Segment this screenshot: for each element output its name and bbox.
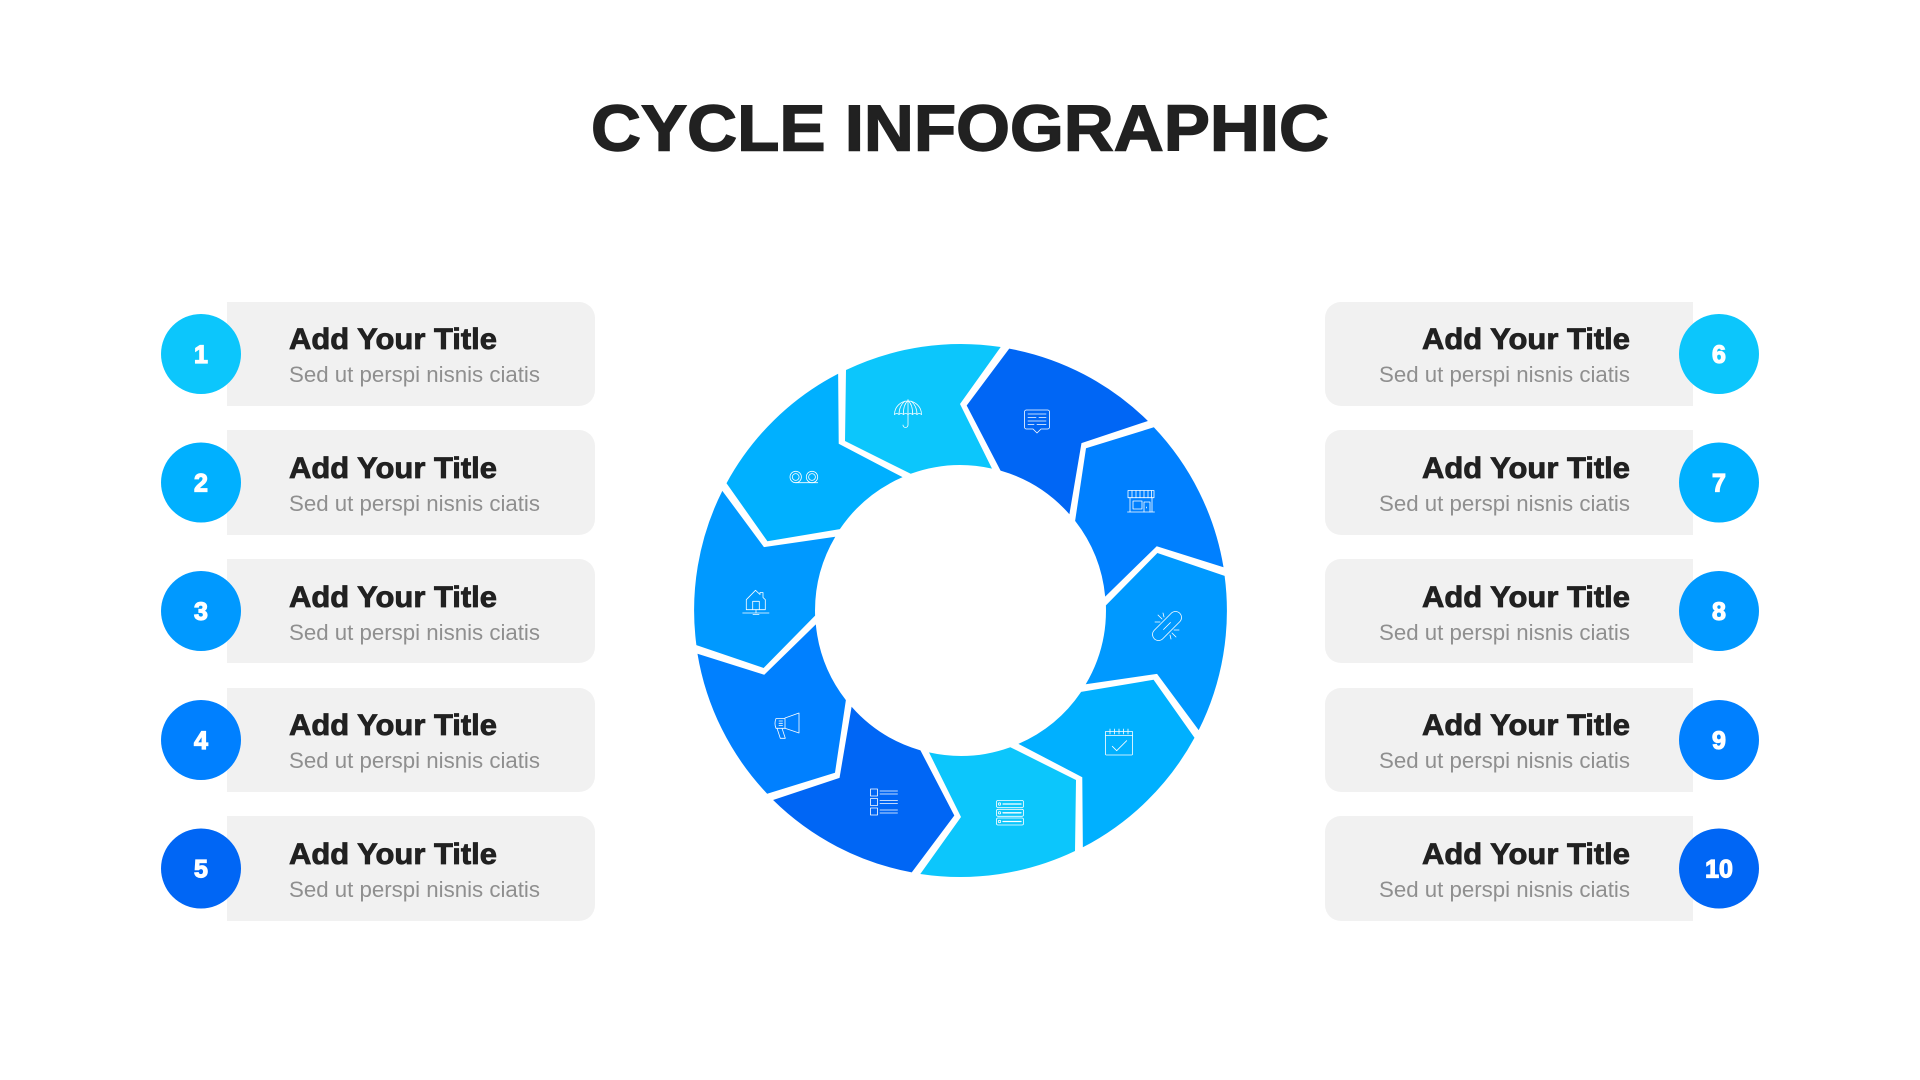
icon: megaphone (775, 713, 799, 738)
item 9: Add Your Title (1422, 709, 1630, 742)
icon: broken link (1150, 609, 1184, 643)
item 6: Add Your Title (1422, 323, 1630, 356)
item 8: Sed ut perspi nisnis ciatis (1379, 620, 1630, 645)
item 6: 6 (1712, 341, 1726, 369)
item 1: Sed ut perspi nisnis ciatis (289, 362, 540, 387)
item 1: 1 (194, 341, 208, 369)
item 7 (1325, 430, 1759, 535)
item 3: 3 (194, 598, 208, 626)
item 10: Sed ut perspi nisnis ciatis (1379, 877, 1630, 902)
item 7: Sed ut perspi nisnis ciatis (1379, 491, 1630, 516)
item 7: 7 (1712, 470, 1726, 498)
cycle ring chart (671, 327, 1250, 894)
item 5 (161, 816, 595, 921)
icon: film reel (790, 471, 818, 483)
item 9: Sed ut perspi nisnis ciatis (1379, 748, 1630, 773)
segment 8 (695, 615, 866, 803)
item 3: Add Your Title (289, 581, 497, 614)
icon: umbrella (894, 400, 922, 428)
segment 10 (710, 371, 913, 568)
panel: right list (1325, 302, 1759, 921)
item 5: Add Your Title (289, 838, 497, 871)
item 2: Add Your Title (289, 452, 497, 485)
item 9 (1325, 688, 1759, 792)
item 4 (161, 688, 595, 792)
icon: shop (1128, 490, 1154, 512)
segment 3 (1055, 418, 1226, 606)
item 6: Sed ut perspi nisnis ciatis (1379, 362, 1630, 387)
item 2 (161, 430, 595, 535)
item 8 (1325, 559, 1759, 663)
item 9: 9 (1712, 727, 1726, 755)
item 2: 2 (194, 470, 208, 498)
panel: left list (161, 302, 595, 921)
item 10: Add Your Title (1422, 838, 1630, 871)
item 4: 4 (194, 727, 208, 755)
item 5: 5 (194, 856, 208, 884)
segment 5 (1008, 653, 1211, 850)
icon: chat bubble (1024, 410, 1050, 433)
item 1: Add Your Title (289, 323, 497, 356)
item 1 (161, 302, 595, 406)
icon: networked home (743, 590, 769, 614)
item 3: Sed ut perspi nisnis ciatis (289, 620, 540, 645)
segment 9 (671, 490, 843, 678)
item 6 (1325, 302, 1759, 406)
segment 2 (947, 327, 1150, 524)
item 4: Add Your Title (289, 709, 497, 742)
segment 6 (920, 747, 1076, 877)
icon: calendar check (1106, 729, 1132, 755)
item 7: Add Your Title (1422, 452, 1630, 485)
segment 1 (845, 344, 1001, 474)
icon: checklist (870, 789, 898, 815)
item 5: Sed ut perspi nisnis ciatis (289, 877, 540, 902)
item 8: Add Your Title (1422, 581, 1630, 614)
item 2: Sed ut perspi nisnis ciatis (289, 491, 540, 516)
icon: server stack (996, 800, 1024, 825)
item 10 (1325, 816, 1759, 921)
item 8: 8 (1712, 598, 1726, 626)
item 10: 10 (1705, 856, 1733, 884)
title: CYCLE INFOGRAPHIC (591, 92, 1329, 164)
segment 7 (771, 697, 974, 894)
segment 4 (1078, 543, 1250, 731)
item 4: Sed ut perspi nisnis ciatis (289, 748, 540, 773)
item 3 (161, 559, 595, 663)
